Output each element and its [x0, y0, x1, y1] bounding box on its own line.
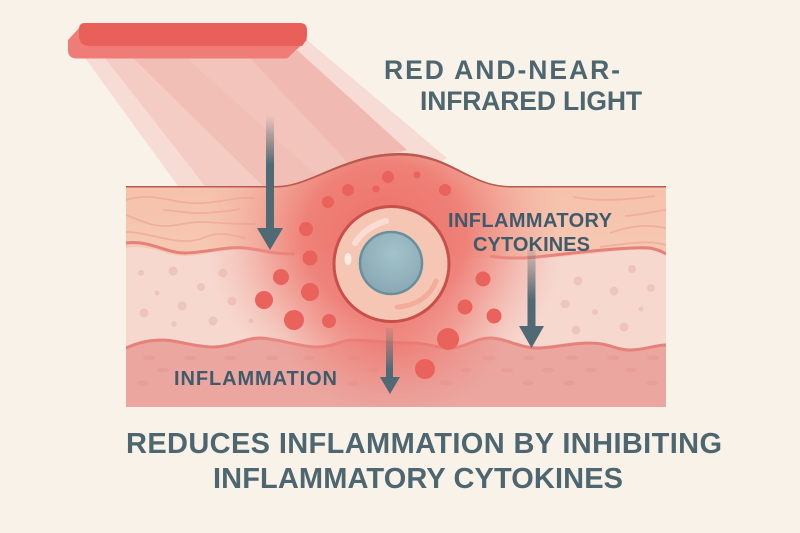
arrow: light into skin: [257, 115, 283, 250]
hypodermis dashes: [137, 356, 659, 386]
light panel: [68, 23, 307, 58]
label: inflammatory cytokines: INFLAMMATORY: [448, 210, 613, 232]
skin layer: dermis: [126, 247, 666, 350]
cytokine dots: [255, 171, 502, 379]
nucleus: [360, 232, 422, 294]
skin layer: epidermis: [126, 150, 666, 260]
skin cross-section: [126, 153, 666, 407]
skin layer: hypodermis: [126, 338, 666, 407]
lower glow: [306, 312, 484, 396]
title: [126, 428, 722, 495]
label: red and near-infrared light: RED AND-NEAR-: [384, 55, 620, 85]
arrow: cytokines down: [519, 250, 544, 348]
skin surface line: [126, 154, 666, 186]
title: REDUCES INFLAMMATION BY INHIBITING: [126, 428, 722, 460]
label: inflammatory cytokines: CYTOKINES: [473, 234, 590, 256]
label: inflammatory cytokines: [448, 210, 613, 256]
cell highlights: [355, 221, 386, 243]
immune cell: [334, 206, 449, 322]
label: red and near-infrared light: [384, 55, 642, 116]
tissue specks: [138, 265, 655, 334]
arrow: down from cell: [380, 328, 400, 394]
inflammation glow: [222, 153, 548, 356]
title: INFLAMMATORY CYTOKINES: [213, 463, 623, 495]
label: inflammation: INFLAMMATION: [174, 368, 337, 390]
light beams: [85, 40, 447, 186]
skin fibres: [126, 196, 666, 247]
layer boundary lines: [126, 243, 666, 350]
label: red and near-infrared light: INFRARED LIGHT: [420, 86, 642, 116]
